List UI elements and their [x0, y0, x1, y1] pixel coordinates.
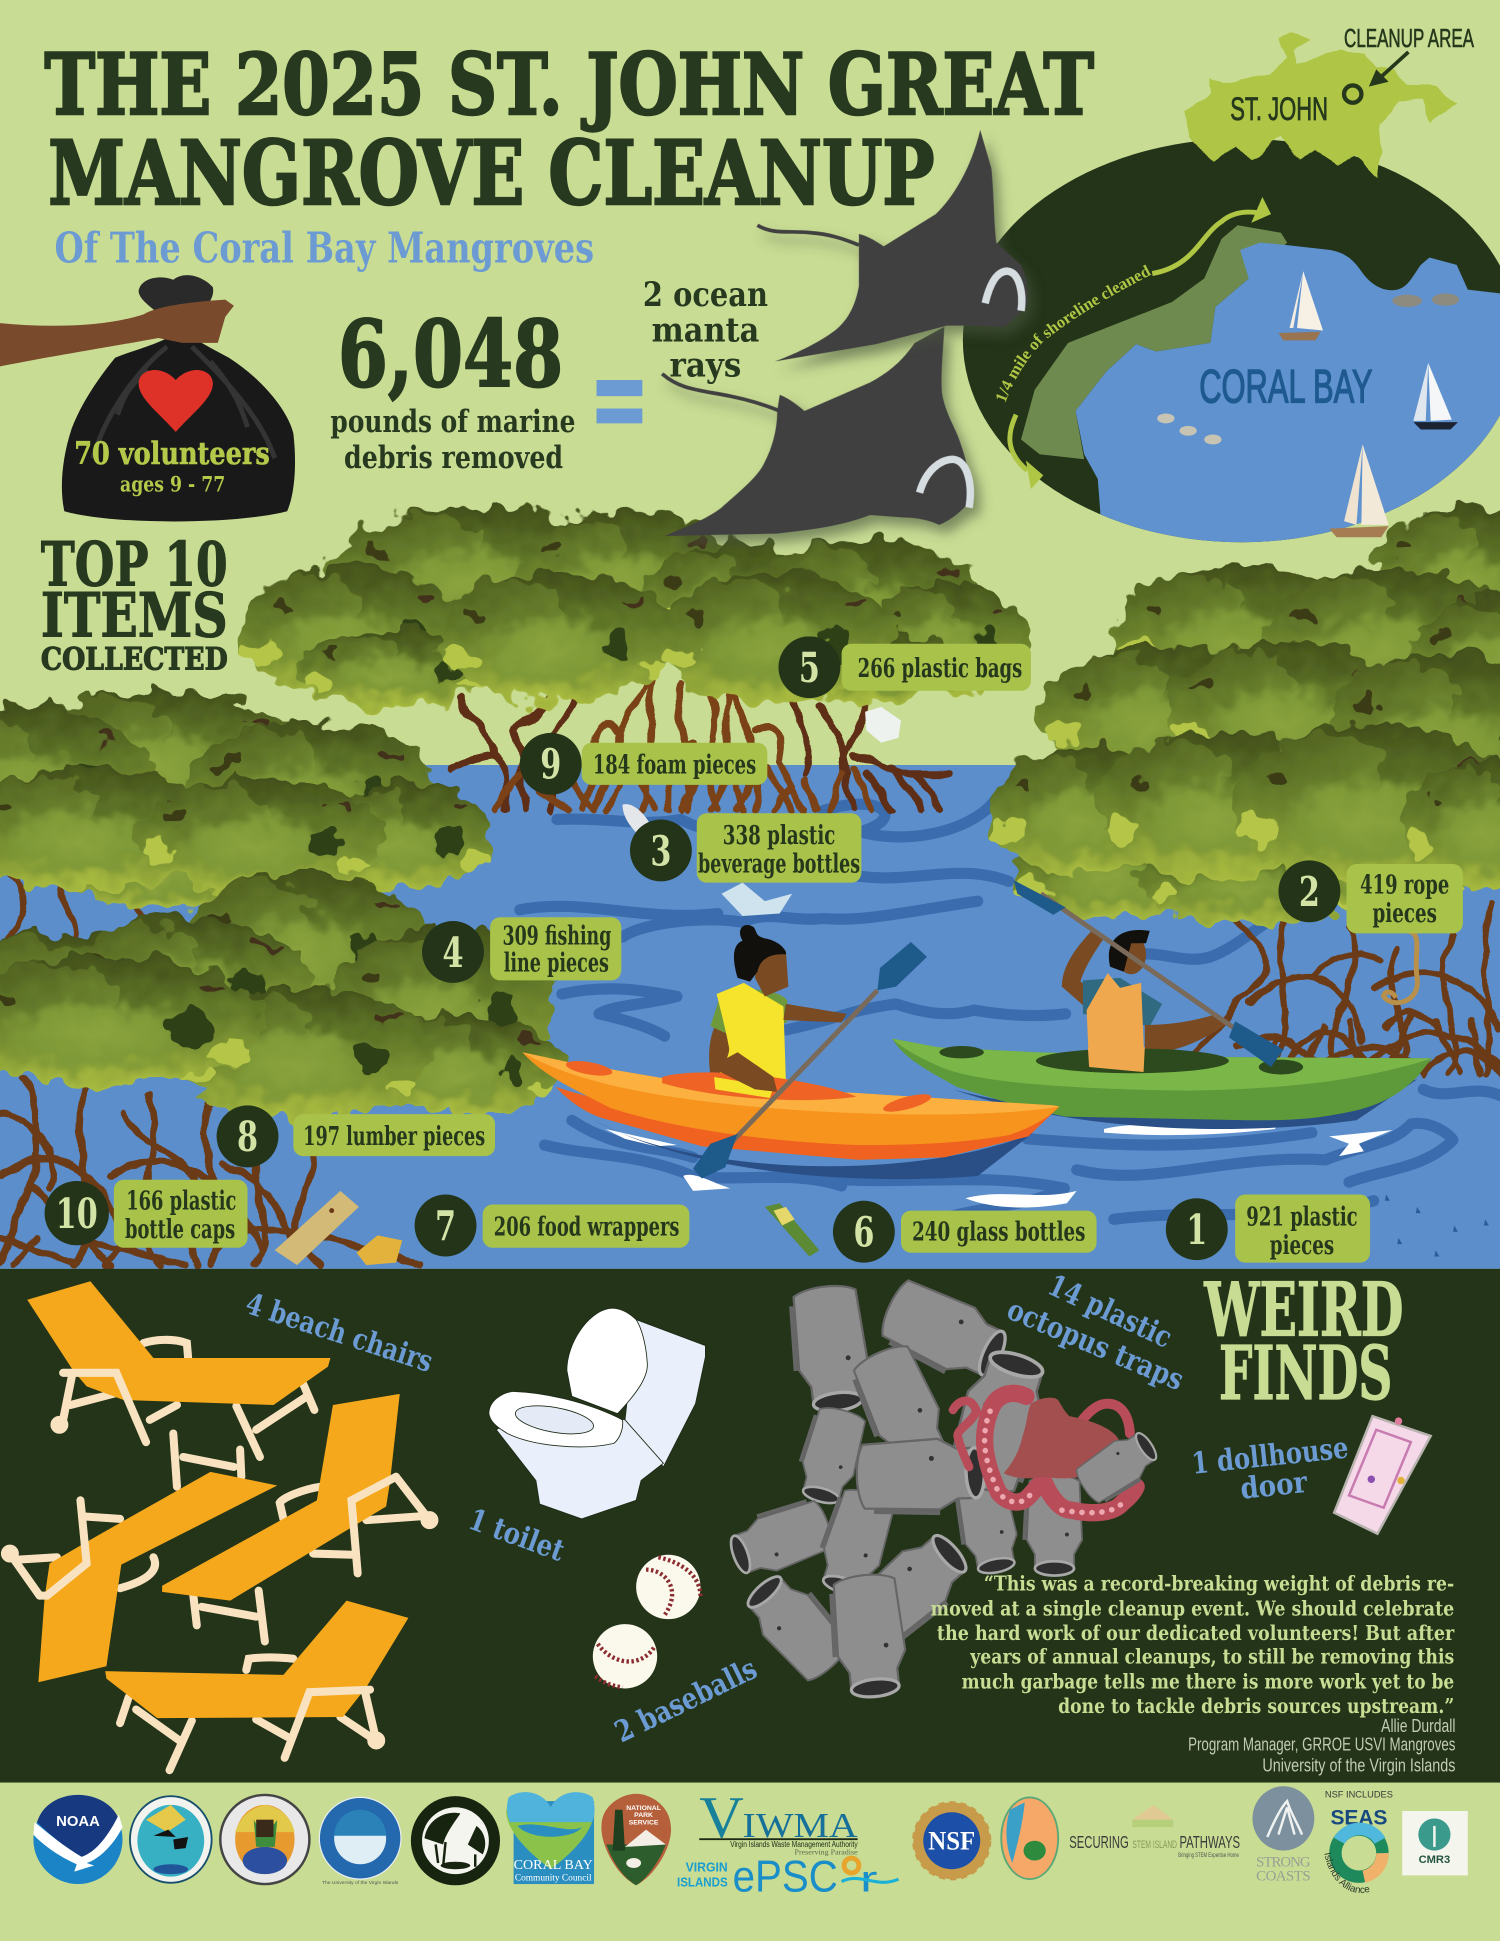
location arrow [1369, 52, 1408, 87]
item 6 [833, 1201, 1097, 1263]
title: THE 2025 ST. JOHN GREAT [45, 35, 1094, 134]
item 3 [630, 813, 861, 883]
man arm raised [1062, 931, 1104, 1005]
logo: Coral Bay Community Council: Community Council [515, 1872, 592, 1883]
logo: Virgin Islands EPSCoR [677, 1852, 899, 1901]
item 1: 1 [1186, 1206, 1207, 1254]
deck patches [565, 1058, 933, 1115]
chair 2 [162, 1394, 434, 1641]
quote attribution: Allie Durdall [1381, 1715, 1455, 1736]
item 6: 6 [853, 1209, 874, 1257]
logo: Strong Coasts: STRONG [1256, 1855, 1311, 1871]
manta rays [662, 130, 1028, 536]
octopus traps label: 14 plastic [1042, 1268, 1177, 1356]
octopus traps [723, 1275, 1082, 1700]
bag knot [139, 275, 213, 334]
logo: National Park Service [601, 1794, 671, 1885]
beach chairs [5, 1281, 434, 1770]
woman forearm [710, 1052, 777, 1092]
item 5 [778, 636, 1031, 698]
hull [892, 1039, 1432, 1120]
logo: CMR3: CMR3 [1419, 1854, 1450, 1866]
woman lap vest [714, 1077, 774, 1098]
St. John island locator [1186, 23, 1474, 178]
weird finds heading: WEIRD [1204, 1266, 1403, 1354]
baseball 1 [636, 1555, 700, 1619]
roots: central tree [452, 693, 947, 810]
item 2: pieces [1373, 899, 1437, 929]
man head [1116, 935, 1146, 974]
manta comparison label: manta [652, 311, 759, 350]
bay water [1075, 243, 1500, 557]
weird finds heading: FINDS [1219, 1329, 1392, 1417]
orange kayak and paddler [522, 925, 1059, 1179]
plastic bottle [623, 804, 653, 839]
item 10 [45, 1180, 248, 1248]
tree: central canopy [241, 507, 1027, 707]
baseballs [593, 1555, 700, 1688]
logo: CMR3 [1402, 1811, 1468, 1875]
heart [139, 370, 213, 432]
tree: left upper canopy [0, 690, 491, 907]
dollhouse door label: 1 dollhouse [1190, 1431, 1350, 1482]
lumber [275, 1191, 359, 1265]
logo: National Park Service: PARK [634, 1812, 653, 1819]
shadow [594, 1120, 1033, 1179]
glass bottle [765, 1203, 819, 1256]
logo: VIWMA: IWMA [743, 1807, 858, 1845]
logo: NSF [913, 1802, 990, 1879]
octopus traps label: octopus traps [1002, 1292, 1189, 1398]
food wrapper [356, 1235, 402, 1265]
hull [522, 1052, 1059, 1145]
title [45, 35, 1094, 225]
item 3: 338 plastic [723, 821, 835, 851]
equals sign [597, 380, 642, 423]
item 10: bottle caps [125, 1215, 235, 1245]
item 4: 4 [442, 929, 463, 977]
fish school lower [1157, 413, 1222, 444]
quote [931, 1572, 1454, 1718]
tentacles [953, 1393, 1136, 1513]
woman arm back [709, 1009, 738, 1077]
chair 3 [5, 1433, 277, 1682]
mangrove trees [0, 507, 1500, 1117]
trap in front of octopus [1072, 1425, 1165, 1509]
panel background [0, 1269, 1500, 1783]
logo: NOAA [33, 1795, 123, 1884]
woman hair [734, 925, 786, 982]
manta comparison label [643, 275, 768, 384]
volunteers: 70 volunteers [74, 436, 270, 472]
debris illustrations [275, 707, 1489, 1265]
hull rim [556, 1087, 1059, 1160]
logo: VIWMA: Virgin Islands Waste Management Authority [730, 1840, 858, 1849]
item 9: 184 foam pieces [593, 751, 756, 781]
logo: GRROE USVI Mangroves [411, 1796, 500, 1885]
title: MANGROVE CLEANUP [48, 121, 934, 225]
woman sleeve [710, 989, 787, 1037]
lower manta [662, 327, 972, 536]
manta comparison label: rays [670, 345, 741, 384]
item 1 [1166, 1195, 1370, 1263]
baseballs label: 2 baseballs [609, 1651, 763, 1750]
toilet tank [625, 1320, 705, 1467]
bay label: CORAL BAY [1199, 359, 1373, 412]
shadow [953, 1079, 1417, 1129]
deck [892, 1039, 1432, 1091]
island name: ST. JOHN [1230, 91, 1328, 127]
fish school upper [1392, 293, 1459, 307]
man vest [1087, 973, 1145, 1072]
logo: Virgin Islands EPSCoR: ISLANDS [677, 1875, 728, 1890]
small fish specks [1385, 1195, 1489, 1256]
roots: right tree [1193, 904, 1500, 1074]
item 7 [415, 1195, 689, 1256]
man vest front [1088, 1047, 1145, 1072]
man hair [1109, 930, 1150, 972]
logo: SEAS Islands Alliance [1324, 1789, 1393, 1894]
green kayak and paddler [892, 880, 1432, 1129]
baseball 2 [593, 1624, 657, 1688]
item 7: 206 food wrappers [494, 1212, 679, 1242]
rope [1384, 931, 1417, 1003]
logo: Securing STEM Island Pathways: STEM ISLAND [1132, 1839, 1177, 1851]
suckers [985, 1411, 1123, 1513]
upper manta [757, 130, 1028, 361]
beach chairs label: 4 beach chairs [241, 1286, 437, 1380]
shoreline arrow [1010, 197, 1271, 489]
item 2 [1278, 860, 1463, 933]
tree: left lower canopy [0, 872, 561, 1117]
item 10: 166 plastic [126, 1186, 236, 1216]
mantle [1004, 1398, 1119, 1478]
logo: Securing STEM Island Pathways [1069, 1805, 1240, 1859]
crumpled bottle [722, 883, 792, 916]
chair 4 [105, 1601, 408, 1770]
logo: Coral Bay Community Council: CORAL BAY [514, 1857, 593, 1872]
logo: NSF: NSF [928, 1826, 975, 1855]
mangrove roots [0, 675, 1500, 1265]
dark land circle [963, 139, 1500, 542]
logo: Virgin Islands EPSCoR: VIRGIN [686, 1860, 728, 1875]
item 5: 266 plastic bags [858, 654, 1022, 684]
item 7: 7 [435, 1202, 456, 1250]
item 2: 2 [1299, 868, 1320, 916]
island shape [1186, 33, 1457, 178]
panel: weird finds [0, 1266, 1500, 1783]
partner logos [33, 1784, 1468, 1901]
top 10 heading: TOP 10 [41, 530, 228, 601]
man arm low [1145, 1014, 1225, 1053]
sailboat 2 [1413, 363, 1458, 430]
logo: University of the Virgin Islands [220, 1795, 309, 1884]
top 10 heading: COLLECTED [41, 642, 228, 678]
item 5: 5 [799, 644, 820, 692]
logo: SEAS Islands Alliance: Islands Alliance [1324, 1852, 1370, 1894]
location ring [1344, 85, 1361, 103]
toilet seat opening [513, 1401, 596, 1439]
logo: Coral Bay Community Council [506, 1792, 595, 1884]
dollhouse door [1334, 1416, 1431, 1534]
top 10 heading: ITEMS [41, 580, 228, 651]
logo: Virgin Islands EPSCoR: r [860, 1857, 877, 1899]
item 2: 419 rope [1360, 871, 1449, 901]
logo: Strong Coasts [1252, 1786, 1314, 1884]
item 3: 3 [650, 827, 671, 875]
item 1: 921 plastic [1246, 1203, 1358, 1233]
deck [522, 1052, 1059, 1115]
cockpit [1036, 1048, 1229, 1073]
item 4: line pieces [504, 949, 609, 979]
sailboat 1 [1278, 271, 1323, 340]
man shirt [1083, 978, 1162, 1026]
logo: Center for Marine and Environmental Studies [319, 1797, 401, 1886]
logo: Securing STEM Island Pathways: Bringing STEM Expertise Home [1178, 1852, 1239, 1859]
weird finds heading [1204, 1266, 1403, 1417]
logo: Securing STEM Island Pathways: SECURING [1069, 1832, 1129, 1852]
logo: National Park Service: NATIONAL [626, 1805, 661, 1812]
tree: right canopy [990, 508, 1500, 924]
toilet lid [567, 1308, 647, 1414]
item 8: 197 lumber pieces [303, 1122, 485, 1152]
item 9: 9 [540, 741, 561, 789]
logo: VIWMA: V [699, 1784, 744, 1850]
main statistic: debris removed [344, 440, 563, 476]
dollhouse door label [1190, 1431, 1350, 1507]
main statistic: 6,048 [338, 300, 563, 408]
octopus traps label [1002, 1268, 1189, 1398]
bag wrinkles [93, 347, 275, 458]
cockpit [662, 1072, 856, 1100]
roots: left upper [0, 867, 151, 941]
logo: VIWMA [699, 1784, 858, 1856]
subtitle: Of The Coral Bay Mangroves [54, 222, 594, 272]
cleaned shoreline band [1021, 225, 1287, 459]
top 10 heading [41, 530, 228, 678]
water ripples [520, 798, 1500, 1219]
woman paddle [693, 942, 927, 1178]
item 6: 240 glass bottles [912, 1217, 1085, 1247]
logo: National Park Service: SERVICE [629, 1820, 659, 1827]
toilet seat [489, 1391, 623, 1447]
logo: NOAA: NOAA [56, 1814, 100, 1830]
logo: planning and natural resources [130, 1796, 212, 1883]
chair 1 [27, 1281, 330, 1457]
water [0, 765, 1500, 1269]
item 3: beverage bottles [698, 850, 860, 880]
item 8 [217, 1105, 495, 1167]
logo: Strong Coasts: COASTS [1256, 1868, 1311, 1884]
octopus [953, 1393, 1165, 1513]
logo: SEAS Islands Alliance: SEAS [1330, 1807, 1387, 1830]
item 10: 10 [56, 1190, 98, 1238]
arm [0, 300, 234, 366]
toilet base [496, 1399, 663, 1519]
deck patches [939, 1046, 1303, 1074]
woman head [755, 947, 788, 996]
roots: left lower [0, 1077, 421, 1265]
man paddle [1014, 880, 1283, 1067]
plastic bag [865, 707, 901, 743]
logo: VIWMA: Preserving Paradise [795, 1847, 858, 1856]
bag body [62, 332, 295, 521]
ages: ages 9 - 77 [120, 471, 225, 496]
dollhouse door label: door [1239, 1465, 1309, 1507]
garbage bag with hand [0, 275, 295, 521]
woman vest [714, 983, 786, 1097]
logo: Center for Marine and Environmental Studies: The University of the Virgin Islands [322, 1880, 399, 1886]
main statistic: pounds of marine [330, 404, 575, 440]
logo: Navigating Home [1001, 1797, 1058, 1879]
main statistic [330, 300, 575, 476]
logo: SEAS Islands Alliance: NSF INCLUDES [1325, 1789, 1393, 1799]
quote attribution [1188, 1715, 1455, 1775]
manta comparison label: 2 ocean [643, 275, 768, 314]
foam [605, 1116, 1392, 1208]
sailboat 3 [1329, 444, 1389, 537]
toilet [489, 1308, 705, 1519]
item 1: pieces [1270, 1231, 1334, 1261]
item 4 [422, 917, 621, 983]
logo: Securing STEM Island Pathways: PATHWAYS [1179, 1832, 1240, 1852]
item 8: 8 [237, 1113, 258, 1161]
logo: Virgin Islands EPSCoR: ePSC [733, 1852, 838, 1901]
item 4: 309 fishing [502, 922, 611, 952]
map: Coral Bay inset [962, 140, 1500, 542]
item 9 [520, 733, 767, 795]
toilet label: 1 toilet [464, 1502, 569, 1569]
woman arm paddle [783, 1004, 847, 1022]
